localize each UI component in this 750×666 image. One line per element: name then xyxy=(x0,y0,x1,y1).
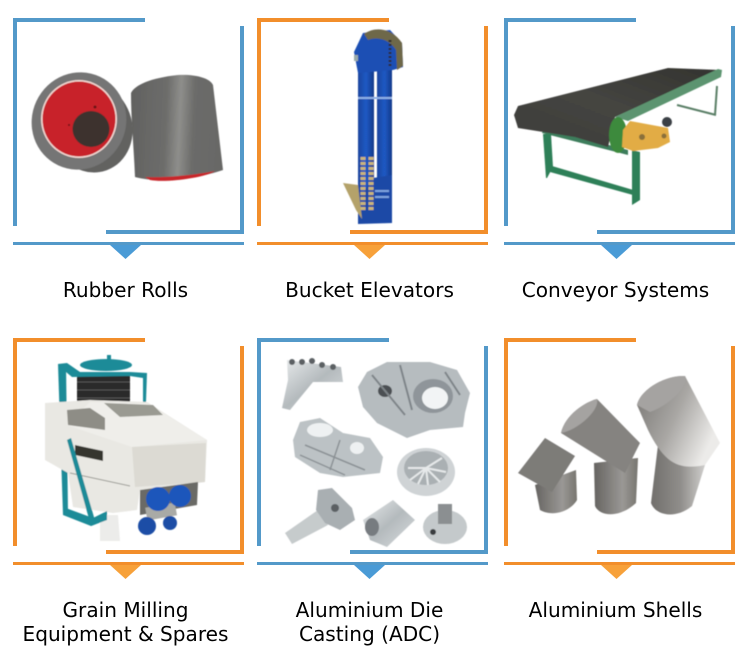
frame: grain milling xyxy=(13,338,244,579)
panel: rubber rolls xyxy=(13,18,244,302)
image: rubber rolls xyxy=(16,57,223,185)
label: die casting: Casting (ADC) xyxy=(299,622,440,646)
label: aluminium shells: Aluminium Shells xyxy=(529,598,702,622)
frame: bucket elevators xyxy=(257,18,488,259)
image: bucket elevator xyxy=(343,29,403,224)
label: bucket elevators: Bucket Elevators xyxy=(285,278,454,302)
frame: rubber rolls xyxy=(13,18,244,259)
panel: conveyor systems xyxy=(504,18,735,302)
label: die casting: Aluminium Die xyxy=(296,598,443,622)
panel: aluminium die casting xyxy=(257,338,488,646)
panel: grain milling xyxy=(13,338,244,646)
panel: bucket elevators xyxy=(257,18,488,302)
label: grain milling: Grain Milling xyxy=(62,598,189,622)
label: grain milling: Equipment & Spares xyxy=(22,622,228,646)
label: conveyor systems: Conveyor Systems xyxy=(522,278,709,302)
label: rubber rolls: Rubber Rolls xyxy=(63,278,188,302)
image: die cast parts xyxy=(282,358,470,547)
frame: conveyor systems xyxy=(504,18,735,259)
image: grain milling machine xyxy=(45,355,207,541)
image: shells xyxy=(518,376,720,514)
frame: aluminium shells xyxy=(504,338,735,579)
image: conveyor xyxy=(514,68,722,205)
panel: aluminium shells xyxy=(504,338,735,622)
frame: die casting xyxy=(257,338,488,579)
